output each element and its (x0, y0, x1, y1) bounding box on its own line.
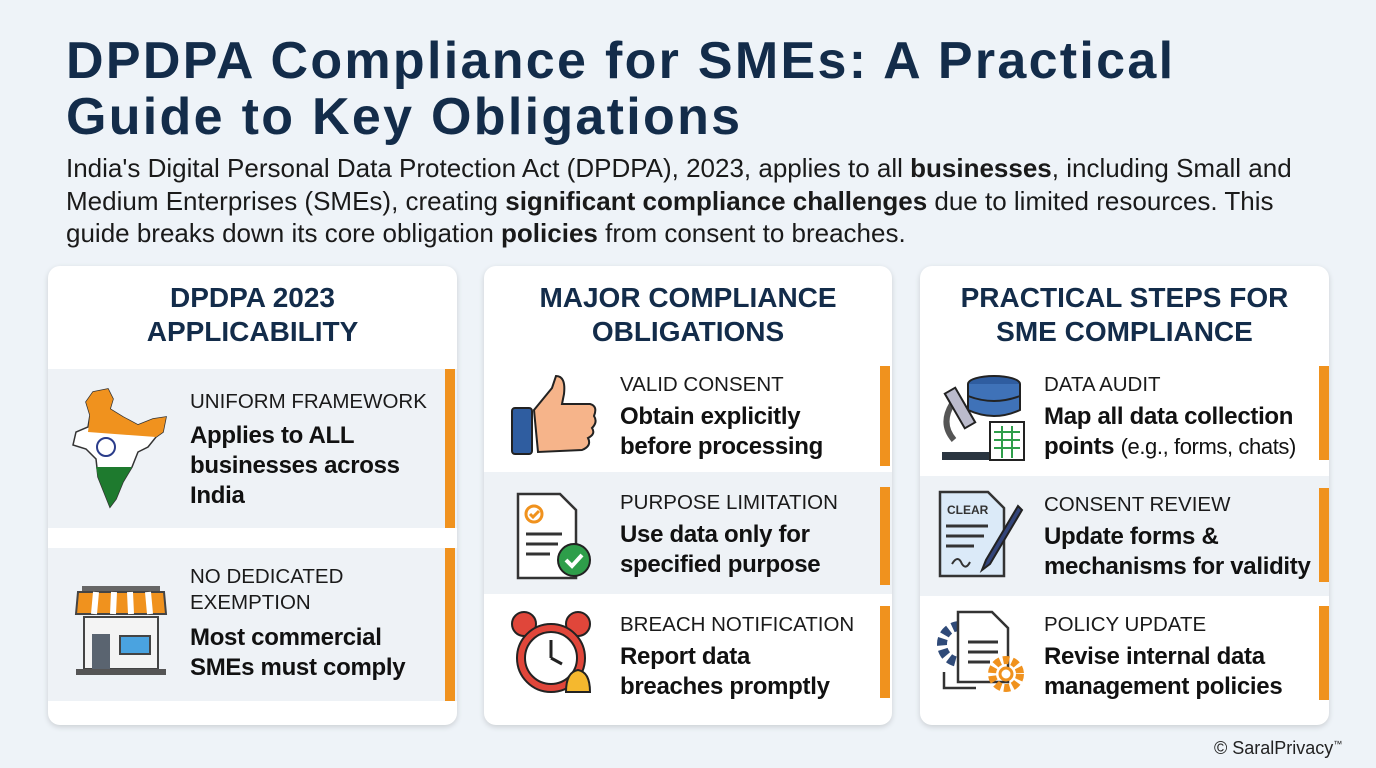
row: valid consent: Obtain explicitly (620, 403, 800, 430)
row: purpose limitation (484, 472, 892, 594)
row: purpose limitation: PURPOSE LIMITATION (620, 491, 838, 514)
icon: clear form pen: CLEAR (947, 503, 989, 517)
row: no exemption (48, 548, 457, 701)
heading: obligations: MAJOR COMPLIANCE (539, 282, 837, 313)
row: data audit: points (e.g., forms, chats) (1044, 433, 1296, 460)
panel: applicability (48, 266, 457, 725)
label: UNIFORM FRAMEWORK (190, 390, 427, 413)
row: data audit: DATA AUDIT (1044, 373, 1161, 396)
subtitle (66, 153, 1292, 248)
panel: obligations (484, 266, 892, 725)
row: policy update (937, 606, 1329, 700)
row: uniform framework (48, 369, 457, 528)
icon: india map (72, 388, 167, 508)
heading: practical steps (961, 282, 1288, 347)
row: no exemption: Most commercial (190, 624, 382, 651)
row: policy update: POLICY UPDATE (1044, 613, 1206, 636)
heading: applicability (147, 282, 358, 347)
row: data audit (942, 366, 1329, 461)
subtitle: Medium Enterprises (SMEs), creating significant compliance challenges due to limited resources. This (66, 186, 1274, 216)
footer: copyright: © SaralPrivacy™ (1214, 738, 1342, 758)
icon: document check (516, 492, 591, 580)
row: valid consent: VALID CONSENT (620, 373, 784, 396)
title (66, 32, 1175, 146)
row: valid consent: before processing (620, 433, 823, 460)
text: businesses across (190, 452, 400, 479)
icon: clear form pen (938, 490, 1024, 578)
row: policy update: management policies (1044, 673, 1282, 700)
row: breach notification: breaches promptly (620, 673, 830, 700)
row: policy update: Revise internal data (1044, 643, 1265, 670)
text: Applies to ALL (190, 422, 354, 449)
title: DPDPA Compliance for SMEs: A Practical (66, 32, 1175, 90)
text: India (190, 482, 245, 509)
heading: practical steps: SME COMPLIANCE (996, 316, 1253, 347)
title: Guide to Key Obligations (66, 88, 742, 146)
heading: applicability: DPDPA 2023 (170, 282, 335, 313)
subtitle: India's Digital Personal Data Protection Act (DPDPA), 2023, applies to all businesses, including Small and (66, 153, 1292, 183)
row: purpose limitation: specified purpose (620, 551, 820, 578)
row: no exemption: EXEMPTION (190, 591, 311, 614)
text (190, 422, 400, 509)
icon: gears document (937, 610, 1024, 692)
row: valid consent (511, 366, 890, 466)
row: consent review: mechanisms for validity (1044, 553, 1311, 580)
row: no exemption: NO DEDICATED (190, 565, 343, 588)
row: consent review: Update forms & (1044, 523, 1218, 550)
panel: practical steps (920, 266, 1329, 725)
icon: alarm clock (511, 611, 591, 693)
heading: practical steps: PRACTICAL STEPS FOR (961, 282, 1288, 313)
row: breach notification (511, 606, 890, 700)
subtitle: guide breaks down its core obligation policies from consent to breaches. (66, 218, 906, 248)
row: breach notification: BREACH NOTIFICATION (620, 613, 854, 636)
row: consent review: CONSENT REVIEW (1044, 493, 1230, 516)
heading: applicability: APPLICABILITY (147, 316, 358, 347)
icon: shop (74, 586, 168, 675)
row: breach notification: Report data (620, 643, 750, 670)
heading: obligations: OBLIGATIONS (592, 316, 784, 347)
heading: obligations (539, 282, 837, 347)
row: no exemption: SMEs must comply (190, 654, 405, 681)
row: purpose limitation: Use data only for (620, 521, 810, 548)
icon: thumbs up (511, 375, 597, 455)
row: consent review (920, 476, 1329, 596)
icon: microscope database (942, 375, 1025, 461)
row: data audit: Map all data collection (1044, 403, 1293, 430)
